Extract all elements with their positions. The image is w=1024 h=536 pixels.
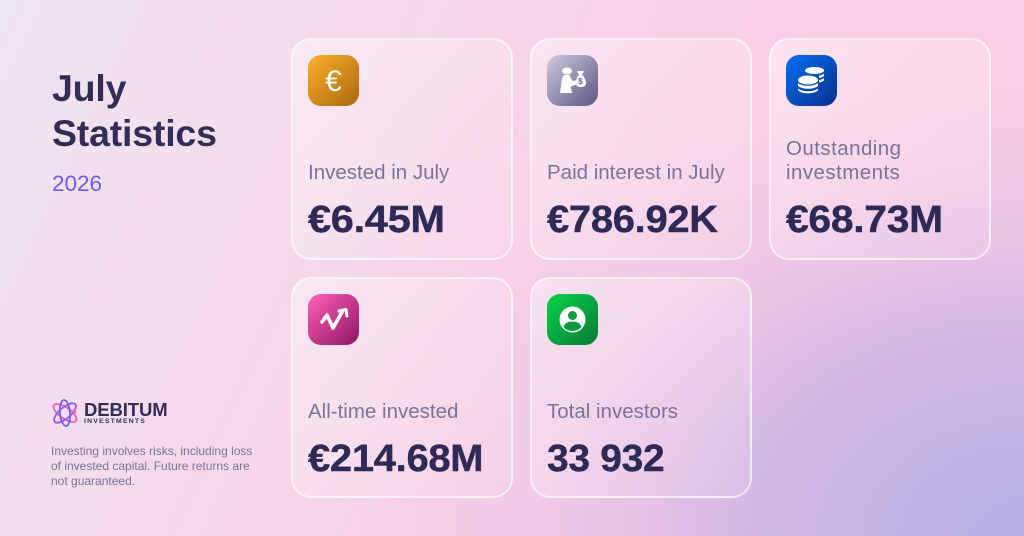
icon: coins bbox=[786, 55, 837, 106]
panel: outstanding investments bbox=[769, 38, 991, 260]
label: Total investors bbox=[547, 400, 678, 423]
icon: user bbox=[547, 294, 598, 345]
title: July bbox=[52, 67, 126, 109]
logo bbox=[52, 399, 168, 427]
disclaimer bbox=[51, 444, 252, 488]
panel: invested in July bbox=[291, 38, 513, 260]
value: €214.68M bbox=[308, 438, 483, 480]
year: 2026 bbox=[52, 171, 102, 196]
value: 33 932 bbox=[547, 438, 664, 480]
panel: total investors bbox=[530, 277, 752, 498]
label: Outstanding bbox=[786, 137, 902, 160]
brand subtitle: INVESTMENTS bbox=[84, 418, 146, 425]
panel: paid interest bbox=[530, 38, 752, 260]
brand name: DEBITUM bbox=[84, 399, 168, 420]
label: All-time invested bbox=[308, 400, 458, 423]
icon: euro bbox=[308, 55, 359, 106]
icon: person with money bag bbox=[547, 55, 598, 106]
icon: person with money bag: $ bbox=[578, 77, 583, 86]
value: €68.73M bbox=[786, 199, 943, 241]
icon: atom logo bbox=[52, 399, 78, 427]
icon: euro: € bbox=[325, 65, 342, 98]
disclaimer: of invested capital. Future returns are bbox=[51, 459, 250, 473]
label: Paid interest in July bbox=[547, 161, 725, 184]
value: €6.45M bbox=[308, 199, 445, 241]
title bbox=[52, 67, 217, 154]
disclaimer: Investing involves risks, including loss bbox=[51, 444, 252, 458]
label bbox=[786, 137, 902, 184]
label: Invested in July bbox=[308, 161, 449, 184]
disclaimer: not guaranteed. bbox=[51, 474, 135, 488]
icon: trend arrow bbox=[308, 294, 359, 345]
label: investments bbox=[786, 161, 900, 184]
value: €786.92K bbox=[547, 199, 718, 241]
panel: all-time invested bbox=[291, 277, 513, 498]
title: Statistics bbox=[52, 112, 217, 154]
